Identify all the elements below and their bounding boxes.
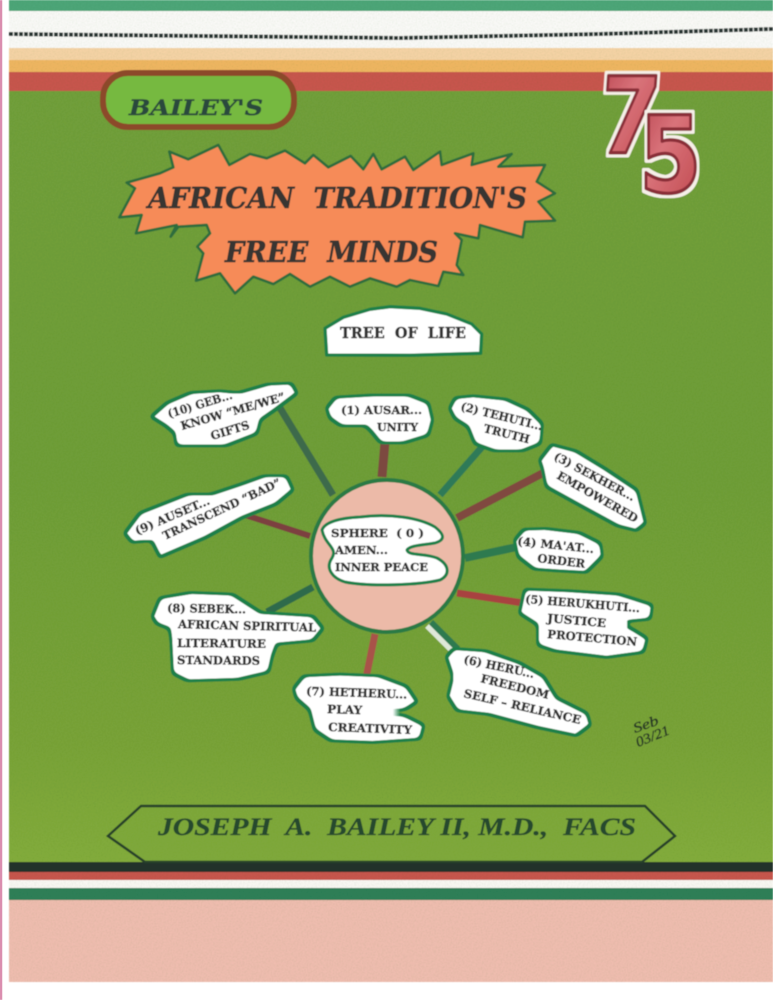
bubble 2: Tehuti [450,397,544,450]
bubble 2: Tehuti: TRUTH [482,421,531,446]
spokes [245,408,545,678]
top striped band [9,0,773,92]
sphere label: SPHERE ( 0 ) [331,526,424,540]
bubble 8: Sebek: AFRICAN SPIRITUAL [177,617,316,635]
bubble 5: Herukhuti [520,590,652,657]
bubble 1: Ausar [327,396,432,442]
bubble 6: Heru: SELF – RELIANCE [462,686,583,727]
bubble 6: Heru [447,649,590,735]
bubble 3: Sekher: EMPOWERED [555,468,641,525]
bubble 3: Sekher [540,445,645,530]
bubble 9: Auset: (9) AUSET... [133,494,212,538]
bubble 7: Hetheru: CREATIVITY [328,720,413,737]
sphere label: INNER PEACE [335,560,428,574]
bubble 5: Herukhuti: JUSTICE [546,611,607,630]
sphere label [322,516,447,585]
title line 1: AFRICAN TRADITION'S [145,181,527,215]
artist signature: Seb [631,714,661,737]
bubble 1: Ausar: (1) AUSAR... [341,403,422,417]
bubble 8: Sebek: STANDARDS [177,653,260,668]
artist signature [631,714,672,751]
number 75: 7 [595,55,665,178]
left page edge [0,0,2,1000]
bubble 3: Sekher: (3) SEKHER... [552,449,638,504]
green fabric background [9,91,773,862]
title line 2: FREE MINDS [224,235,438,269]
heading: tree of life [325,307,482,355]
bubble 4: Ma'at [515,529,602,572]
bubble 7: Hetheru: (7) HETHERU... [306,684,407,702]
artist signature: 03/21 [634,724,672,751]
bubble 8: Sebek: LITERATURE [177,636,266,651]
bubble 7: Hetheru [294,675,423,742]
bubble 7: Hetheru: PLAY [327,702,363,717]
sphere label: AMEN... [334,543,388,557]
bubble 6: Heru: (6) HERU... [462,652,536,681]
title starburst [119,145,555,293]
bubble 6: Heru: FREEDOM [479,671,551,702]
bubble 9: Auset: TRANSCEND “BAD” [160,476,283,543]
bubble 10: Geb: KNOW “ME/WE” [179,390,287,433]
number 75 [595,55,702,218]
bubble 5: Herukhuti: PROTECTION [547,627,638,649]
bubble 10: Geb: (10) GEB... [166,388,234,421]
bubble 8: Sebek [153,593,323,680]
number 75: 5 [639,95,702,218]
bubble 10: Geb [152,384,297,445]
bubble 5: Herukhuti: (5) HERUKHUTI... [525,592,641,615]
badge: Bailey's [103,73,294,127]
bubble 9: Auset [125,476,293,557]
bubble 4: Ma'at: ORDER [537,551,586,571]
heading: tree of life: TREE OF LIFE [340,325,466,342]
author banner: JOSEPH A. BAILEY II, M.D., FACS [157,814,636,841]
bubble 8: Sebek: (8) SEBEK... [167,601,246,616]
badge: Bailey's: BAILEY'S [128,95,263,120]
author banner [108,806,675,862]
bubble 1: Ausar: UNITY [377,420,419,434]
bubble 10: Geb: GIFTS [209,418,251,443]
bubble 2: Tehuti: (2) TEHUTI... [459,399,544,433]
central sphere [311,480,463,632]
bubble 4: Ma'at: (4) MA'AT... [517,534,595,556]
bottom striped band [9,862,773,982]
